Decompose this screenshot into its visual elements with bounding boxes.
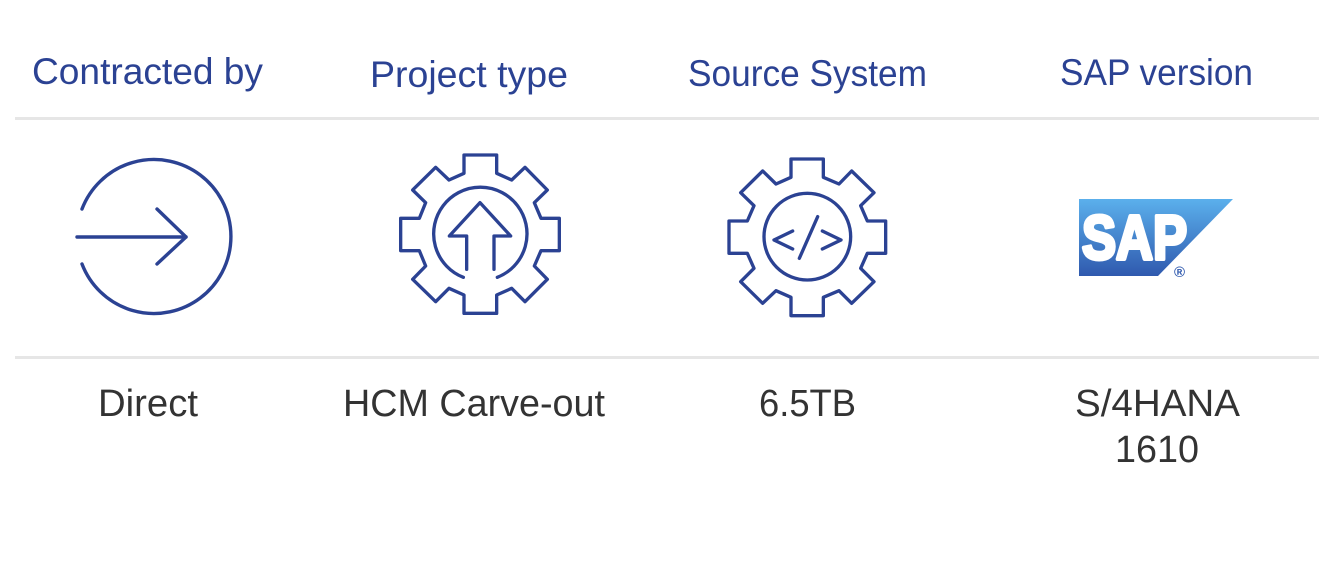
- value: 6.5TB: 6.5TB: [759, 383, 856, 425]
- value: S/4HANA 1610: 1610: [1115, 429, 1199, 471]
- icon: gear with up arrow: [401, 155, 559, 313]
- value: Direct: Direct: [98, 383, 198, 425]
- heading: Contracted by: Contracted by: [32, 51, 263, 92]
- value: S/4HANA 1610: [1075, 383, 1241, 471]
- heading: Source System: Source System: [688, 53, 927, 94]
- icon: SAP logo: [1079, 199, 1233, 281]
- icon: SAP logo: ®: [1174, 264, 1185, 281]
- icon: gear with code symbol: [729, 159, 886, 316]
- icon: circle with entry arrow: [77, 160, 231, 314]
- heading: Project type: Project type: [370, 54, 568, 95]
- icon: SAP logo: SAP: [1082, 204, 1187, 273]
- value: HCM Carve-out: HCM Carve-out: [343, 383, 605, 425]
- value: S/4HANA 1610: S/4HANA: [1075, 383, 1241, 425]
- heading: SAP version: SAP version: [1060, 52, 1253, 93]
